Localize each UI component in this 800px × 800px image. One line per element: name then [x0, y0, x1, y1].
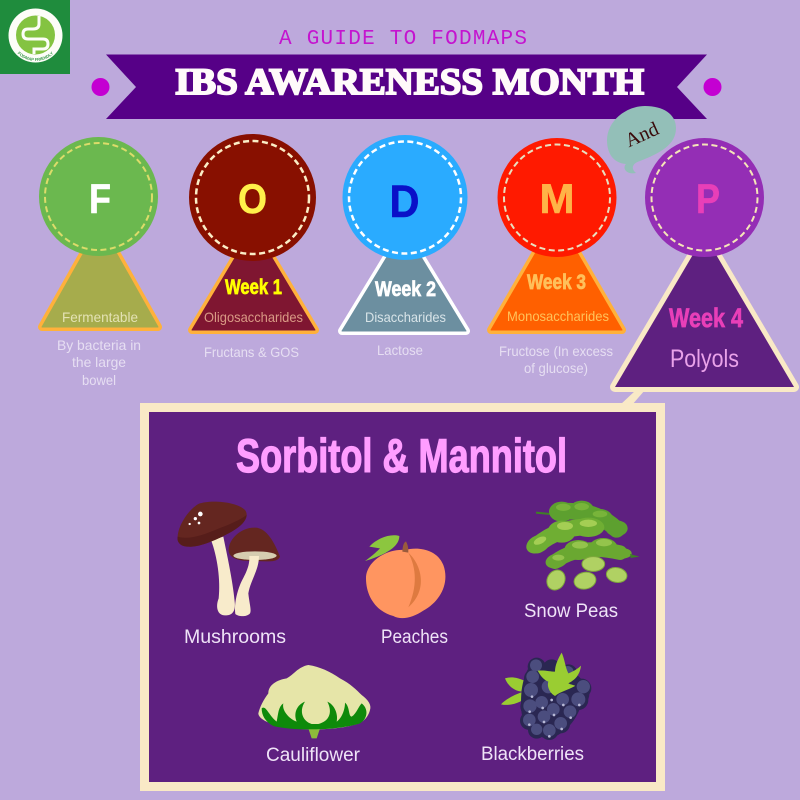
panel heading: Sorbitol & Mannitol — [236, 429, 567, 482]
description D: Lactose — [377, 342, 423, 358]
label Disaccharides: Disaccharides — [365, 309, 446, 325]
description F — [57, 337, 141, 388]
circle O — [189, 134, 316, 261]
letter M: M — [540, 175, 574, 222]
decorative dot right — [704, 78, 722, 96]
triangle M — [491, 217, 622, 330]
description O: Fructans & GOS — [204, 344, 299, 360]
letter F: F — [89, 175, 111, 222]
logo: FODMAP friendly badge: FODMAP FRIENDLY — [18, 51, 53, 61]
label: Blackberries: Blackberries — [481, 744, 584, 765]
letter P: P — [696, 175, 720, 222]
description F: By bacteria in — [57, 337, 141, 353]
label: Mushrooms: Mushrooms — [184, 627, 286, 648]
logo: FODMAP friendly badge — [0, 0, 70, 74]
label Oligosaccharides: Oligosaccharides — [204, 309, 303, 325]
circle P — [645, 138, 764, 257]
letter O group — [189, 134, 316, 360]
triangle D — [342, 229, 466, 331]
title: IBS AWARENESS MONTH — [175, 62, 644, 103]
description F: the large — [72, 354, 126, 370]
triangle P — [615, 235, 794, 387]
description M — [499, 343, 613, 376]
week 2: Week 2 — [375, 278, 436, 301]
heading: a guide to FODMAPs: A GUIDE TO FODMAPS — [279, 28, 527, 51]
triangle O — [192, 227, 315, 330]
speech bubble: And — [607, 106, 676, 173]
description M: Fructose (In excess — [499, 343, 613, 359]
banner ribbon with title — [106, 54, 707, 119]
description F: bowel — [82, 372, 116, 388]
letter O: O — [238, 175, 267, 222]
icon: mushrooms — [177, 502, 280, 616]
week 1: Week 1 — [225, 276, 282, 299]
icon: snow peas — [523, 501, 639, 593]
label Monosaccharides: Monosaccharides — [507, 308, 609, 324]
panel: sorbitol and mannitol foods — [140, 403, 665, 791]
label: Peaches: Peaches — [381, 627, 448, 648]
label: Snow Peas: Snow Peas — [524, 601, 618, 622]
connector between triangle and panel — [620, 390, 645, 405]
icon: cauliflower — [258, 665, 370, 738]
week 3: Week 3 — [527, 271, 586, 294]
letter D group — [342, 135, 468, 358]
icon: peach — [365, 535, 445, 618]
label Polyols: Polyols — [670, 345, 739, 373]
speech bubble: And: And — [622, 118, 662, 152]
letter D: D — [390, 176, 420, 227]
decorative dot left — [92, 78, 110, 96]
letter P group — [615, 138, 794, 387]
letter M group — [491, 138, 622, 376]
label: Cauliflower: Cauliflower — [266, 745, 361, 766]
circle D — [342, 135, 468, 260]
circle M — [498, 138, 616, 257]
week 4: Week 4 — [669, 303, 743, 333]
circle F — [39, 137, 158, 256]
triangle F — [42, 224, 158, 327]
description M: of glucose) — [524, 360, 588, 376]
label Fermentable: Fermentable — [62, 309, 138, 325]
icon: blackberry — [501, 653, 591, 740]
letter F group — [39, 137, 158, 388]
